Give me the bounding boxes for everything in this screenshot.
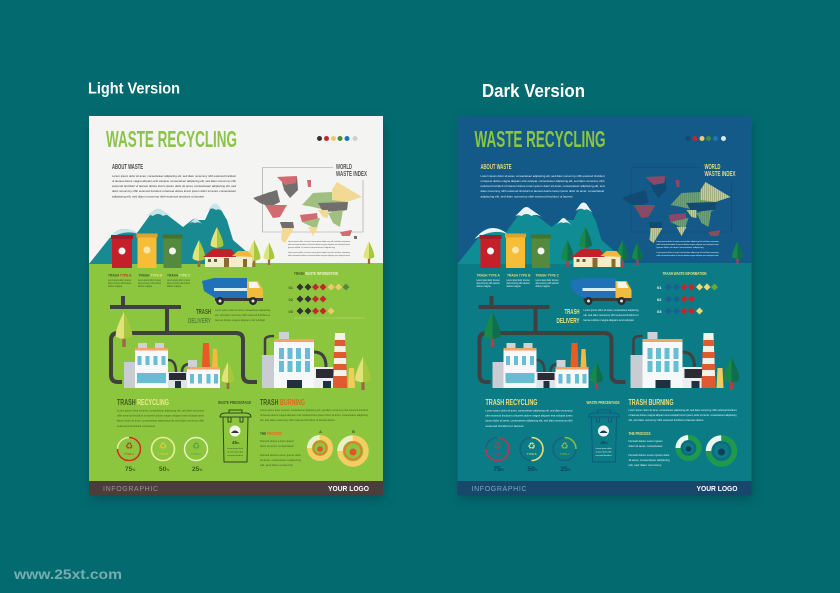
- recycling percentage rings: ♻: [192, 442, 200, 452]
- trash types: diam nonummy nibh euismod: [476, 282, 500, 285]
- tree right: [724, 357, 739, 390]
- recycling percentage rings: ♻: [560, 442, 569, 452]
- footer bar: [458, 481, 752, 496]
- waste percentage bin: euismod tincidunt: [227, 454, 243, 457]
- recycling bins: [111, 234, 182, 268]
- text block: trash burning: [260, 398, 368, 422]
- recycling percentage rings: 75%: [494, 466, 505, 473]
- trash types: TRASH TYPE C: [167, 274, 191, 278]
- text block: trash burning: TRASH BURNING: [260, 398, 305, 407]
- text block: the process: dolor sit amet, consectetuer: [260, 444, 294, 448]
- trash types: dolore magna: [506, 285, 521, 288]
- text block: the process: elit, sed diam nonummy: [260, 463, 294, 467]
- waste percentage bin: WASTE PRECENTAGE: [218, 400, 251, 405]
- text block: about waste: euismod tincidunt ut laoreet dolore lorem ipsum dolor sit amet, consectetuer adipiscing elit, sed: [480, 184, 605, 188]
- text block: about waste: adipiscing elit, sed diam nonummy nibh euismod tincidunt ut laoreet: [112, 194, 204, 198]
- title: WASTE RECYCLING: [106, 126, 237, 152]
- tree left: [116, 312, 132, 347]
- text block: the process: THE PROCESS: [260, 431, 282, 436]
- world waste index map: WORLD: [704, 164, 720, 171]
- recycling percentage rings: [118, 438, 208, 473]
- text block: trash recycling: [486, 398, 573, 428]
- trash types: TRASH TYPE B: [507, 274, 531, 278]
- trees behind village: [193, 227, 374, 267]
- process rings: [310, 429, 366, 464]
- text block: about waste: adipiscing elit, sed diam nonummy nibh euismod tincidunt ut laoreet: [480, 194, 573, 198]
- chart: trash waste information: TRASH WASTE INFORMATION: [294, 271, 338, 276]
- recycling percentage rings: 50%: [159, 466, 170, 473]
- recycling percentage rings: 75%: [125, 466, 136, 473]
- world waste index map: WASTE INDEX: [336, 171, 367, 178]
- text block: trash recycling: [117, 398, 205, 428]
- waste percentage bin: WASTE PRECENTAGE: [586, 400, 620, 405]
- recycling percentage rings: 50%: [528, 466, 539, 473]
- text block: trash recycling: euismod tincidunt ut laoreet: [486, 424, 524, 428]
- chart: trash waste information: [657, 271, 718, 314]
- chart: trash waste information: [288, 271, 365, 318]
- footer bar: INFOGRAPHIC: [103, 486, 158, 493]
- world waste index map: ipsum dolor sit amet consectetuer adipiscing: [656, 246, 704, 249]
- recycling percentage rings: TYPE C: [559, 452, 570, 456]
- recycling percentage rings: TYPE A: [124, 452, 134, 456]
- text block: about waste: diam nonummy nibh euismod tincidunt ut laoreet dolore lorem ipsum dolor sit amet, consectetuer: [480, 189, 604, 193]
- trash types: Lorem ipsum dolor sit amet: [108, 279, 131, 282]
- waste percentage bin: [218, 400, 251, 462]
- recycling percentage rings: ♻: [159, 442, 167, 452]
- trash types: diam nonummy nibh euismod: [506, 282, 530, 285]
- text block: trash burning: Lorem ipsum dolor sit amet, consectetuer adipiscing elit, sed diam nonummy nibh euismod tincidunt: [260, 408, 368, 412]
- recycling percentage rings: TYPE B: [527, 452, 537, 456]
- text block: trash recycling: nibh euismod tincidunt ut laoreet dolore magna aliquam erat volutpat lorem: [117, 414, 205, 418]
- heading: light version: Light Version: [88, 80, 180, 98]
- text block: about waste: [480, 164, 605, 198]
- world waste index map: [622, 164, 736, 257]
- world waste index map: nibh euismod tincidunt ut laoreet dolore magna aliquam erat volutpat lorem: [288, 243, 350, 246]
- trash types: dolore magna: [167, 285, 182, 288]
- text block: the process: THE PROCESS: [628, 431, 650, 436]
- text block: about waste: ABOUT WASTE: [112, 164, 143, 171]
- recycling percentage rings: 25%: [192, 466, 203, 473]
- factory: recycling plant: [124, 343, 220, 388]
- chart: trash waste information: 03: [288, 309, 294, 314]
- house: [203, 249, 253, 267]
- process rings: [678, 438, 734, 464]
- house: [572, 249, 622, 267]
- text block: trash recycling: Lorem ipsum dolor sit amet, consectetuer adipiscing elit, sed diam nonummy: [117, 408, 205, 412]
- colour palette dots: [686, 136, 726, 141]
- trash delivery text: Lorem ipsum dolor sit amet, consectetuer adipiscing: [215, 308, 270, 312]
- text block: trash recycling: ipsum dolor sit amet, consectetuer adipiscing elit, sed diam nonummy nibh: [117, 418, 204, 422]
- panel: light version poster: [89, 116, 383, 499]
- text block: the process: [628, 431, 670, 467]
- text block: the process: Nonsell dolore Lorem ipsum: [260, 439, 295, 443]
- text block: trash recycling: nibh euismod tincidunt ut laoreet dolore magna aliquam erat volutpat lorem: [486, 414, 573, 418]
- text block: trash burning: ut laoreet dolore magna aliquam erat volutpat lorem ipsum dolor sit amet, consectetuer adipiscing: [628, 413, 737, 417]
- text block: the process: sit amet, consectetuer adipiscing: [260, 458, 301, 462]
- trash types: TRASH TYPE B: [138, 274, 163, 278]
- trash delivery text: [556, 307, 639, 325]
- footer bar: [89, 481, 383, 496]
- trash types: Lorem ipsum dolor sit amet: [167, 279, 190, 282]
- text block: about waste: ut laoreet dolore magna aliquam erat volutpat, consectetuer adipiscing elit, sed diam nonummy nibh: [480, 179, 605, 183]
- trash delivery text: laoreet dolore magna aliquam erat volutpat: [215, 318, 265, 322]
- trash types: TRASH TYPE A: [108, 274, 132, 278]
- world waste index map: ipsum dolor sit amet consectetuer adipiscing: [288, 246, 336, 249]
- text block: trash recycling: TRASH RECYCLING: [117, 398, 169, 407]
- world waste index map: nibh euismod tincidunt ut laoreet dolore magna aliquam erat volutpat lorem: [288, 254, 350, 257]
- trash delivery text: [188, 307, 270, 325]
- text block: about waste: ut laoreet dolore magna aliquam erat volutpat, consectetuer adipiscing elit, sed diam nonummy nibh: [112, 179, 236, 183]
- text block: the process: dolor sit amet, consectetuer: [628, 444, 663, 448]
- text block: the process: sit amet, consectetuer adipiscing: [628, 458, 670, 462]
- trash types: diam nonummy nibh euismod: [138, 282, 161, 285]
- waste percentage bin: Lorem ipsum dolor: [596, 447, 612, 450]
- tree middle: [590, 362, 603, 389]
- tree right: [355, 357, 371, 390]
- text block: the process: [260, 431, 301, 467]
- trash delivery text: laoreet dolore magna aliquam erat volutpat: [584, 318, 634, 322]
- text block: the process: elit, sed diam nonummy: [628, 463, 662, 467]
- footer bar: YOUR LOGO: [696, 486, 738, 493]
- text block: trash burning: elit, sed diam nonummy nibh euismod tincidunt ut laoreet dolore: [628, 418, 704, 422]
- chart: trash waste information: 01: [657, 285, 662, 290]
- footer bar: YOUR LOGO: [328, 486, 370, 493]
- text block: trash recycling: Lorem ipsum dolor sit amet, consectetuer adipiscing elit, sed diam nonummy: [486, 408, 573, 412]
- colour palette dots: [317, 136, 358, 141]
- trash types: diam nonummy nibh euismod: [536, 282, 559, 285]
- world waste index map: WORLD: [336, 164, 352, 171]
- mountains: [458, 202, 620, 264]
- recycling percentage rings: TYPE B: [158, 452, 168, 456]
- chart: trash waste information: 01: [288, 285, 294, 290]
- footer bar: INFOGRAPHIC: [472, 486, 526, 493]
- waste percentage bin: [586, 400, 620, 462]
- chart: trash waste information: TRASH WASTE INFORMATION: [662, 271, 706, 276]
- trash types: [108, 274, 191, 288]
- tree middle: [222, 362, 234, 389]
- factory: burning plant: [630, 332, 724, 388]
- mountains: [89, 204, 252, 264]
- watermark: www.25xt.com: [13, 566, 122, 582]
- world waste index map: Lorem ipsum dolor sit amet consectetuer adipiscing elit sed diam nonummy: [288, 251, 351, 254]
- factory: burning plant: [262, 332, 355, 388]
- recycling percentage rings: TYPE A: [493, 452, 503, 456]
- recycling bins: [480, 234, 551, 268]
- text block: about waste: diam nonummy nibh euismod tincidunt ut laoreet dolore lorem ipsum dolor sit amet, consectetuer: [112, 189, 236, 193]
- waste percentage bin: euismod tincidunt: [596, 454, 612, 457]
- text block: trash recycling: ipsum dolor sit amet, consectetuer adipiscing elit, sed diam nonummy nibh: [486, 418, 573, 422]
- world waste index map: nibh euismod tincidunt ut laoreet dolore magna aliquam erat volutpat lorem: [656, 243, 719, 246]
- world waste index map: [253, 164, 367, 257]
- recycling percentage rings: ♻: [125, 442, 133, 452]
- trash types: Lorem ipsum dolor sit amet: [476, 279, 500, 282]
- waste percentage bin: sit amet diam nibh: [227, 450, 244, 454]
- trash delivery text: elit, sed diam nonummy nibh euismod tincidunt ut: [584, 313, 639, 317]
- world waste index map: Lorem ipsum dolor sit amet consectetuer adipiscing elit sed diam nonummy: [288, 240, 351, 243]
- pipelines: [110, 296, 257, 382]
- text block: the process: Nonsell dolore Lorem ipsum: [628, 439, 663, 443]
- text block: trash burning: ut laoreet dolore magna aliquam erat volutpat lorem ipsum dolor sit amet, consectetuer adipiscing: [260, 413, 368, 417]
- text block: about waste: Lorem ipsum dolor sit amet, consectetuer adipiscing elit, sed diam nonummy nibh euismod tincidunt: [112, 174, 236, 178]
- trash types: Lorem ipsum dolor sit amet: [536, 279, 559, 282]
- heading: dark version: Dark Version: [482, 81, 585, 101]
- trash types: Lorem ipsum dolor sit amet: [138, 279, 161, 282]
- world waste index map: Lorem ipsum dolor sit amet consectetuer adipiscing elit sed diam nonummy: [656, 240, 719, 243]
- waste percentage bin: 45%: [600, 440, 609, 445]
- waste percentage bin: sit amet diam nibh: [596, 450, 612, 454]
- trash types: diam nonummy nibh euismod: [108, 282, 131, 285]
- trash delivery text: DELIVERY: [188, 316, 211, 325]
- text block: about waste: Lorem ipsum dolor sit amet, consectetuer adipiscing elit, sed diam nonummy nibh euismod tincidunt: [480, 174, 605, 178]
- chart: trash waste information: 02: [288, 297, 294, 302]
- garbage truck: [570, 278, 632, 305]
- trash types: dolore magna: [108, 285, 123, 288]
- waste percentage bin: 45%: [232, 440, 240, 445]
- chart: trash waste information: 03: [657, 309, 662, 314]
- trash types: diam nonummy nibh euismod: [167, 282, 190, 285]
- tree left: [484, 312, 501, 347]
- garbage truck: [202, 278, 263, 305]
- recycling percentage rings: ♻: [527, 442, 536, 452]
- panel: dark version poster: [458, 116, 752, 499]
- text block: trash recycling: euismod tincidunt ut laoreet: [117, 424, 155, 428]
- text block: trash burning: elit, sed diam nonummy nibh euismod tincidunt ut laoreet dolore: [260, 418, 335, 422]
- world waste index map: Lorem ipsum dolor sit amet consectetuer adipiscing elit sed diam nonummy: [656, 251, 719, 254]
- trees behind village: [561, 227, 743, 267]
- trash types: dolore magna: [476, 285, 491, 288]
- text block: trash burning: Lorem ipsum dolor sit amet, consectetuer adipiscing elit, sed diam nonummy nibh euismod tincidunt: [628, 408, 737, 412]
- trash delivery text: elit, sed diam nonummy nibh euismod tincidunt ut: [215, 313, 270, 317]
- text block: about waste: ABOUT WASTE: [480, 164, 512, 171]
- recycling percentage rings: 25%: [560, 466, 572, 473]
- factory: recycling plant: [492, 343, 588, 388]
- trash delivery text: TRASH: [564, 307, 580, 316]
- recycling percentage rings: TYPE C: [191, 452, 201, 456]
- chart: trash waste information: 02: [657, 297, 662, 302]
- trash types: [476, 274, 560, 288]
- recycling percentage rings: [486, 438, 576, 473]
- text block: trash burning: [628, 398, 737, 422]
- process rings: B: [352, 429, 355, 434]
- trash types: TRASH TYPE C: [536, 274, 560, 278]
- trash types: dolore magna: [536, 285, 550, 288]
- world waste index map: nibh euismod tincidunt ut laoreet dolore magna aliquam erat volutpat lorem: [656, 254, 719, 257]
- trash types: Lorem ipsum dolor sit amet: [506, 279, 530, 282]
- trash delivery text: DELIVERY: [556, 316, 580, 325]
- waste percentage bin: Lorem ipsum dolor: [227, 447, 243, 450]
- pipelines: [478, 296, 626, 382]
- text block: about waste: [112, 164, 236, 198]
- trash types: dolore magna: [138, 285, 153, 288]
- trash delivery text: Lorem ipsum dolor sit amet, consectetuer adipiscing: [584, 308, 639, 312]
- text block: the process: Nonsell dolore Lorem ipsum dolor: [260, 453, 301, 457]
- trash types: TRASH TYPE A: [476, 274, 500, 278]
- trash delivery text: TRASH: [196, 307, 211, 316]
- process rings: A: [319, 429, 322, 434]
- text block: trash recycling: TRASH RECYCLING: [486, 398, 538, 407]
- recycling percentage rings: ♻: [493, 442, 502, 452]
- text block: the process: Nonsell dolore Lorem ipsum dolor: [628, 453, 670, 457]
- text block: trash burning: TRASH BURNING: [628, 398, 674, 407]
- world waste index map: WASTE INDEX: [704, 171, 736, 178]
- text block: about waste: euismod tincidunt ut laoreet dolore lorem ipsum dolor sit amet, consectetuer adipiscing elit, sed: [112, 184, 236, 188]
- title: WASTE RECYCLING: [474, 126, 606, 152]
